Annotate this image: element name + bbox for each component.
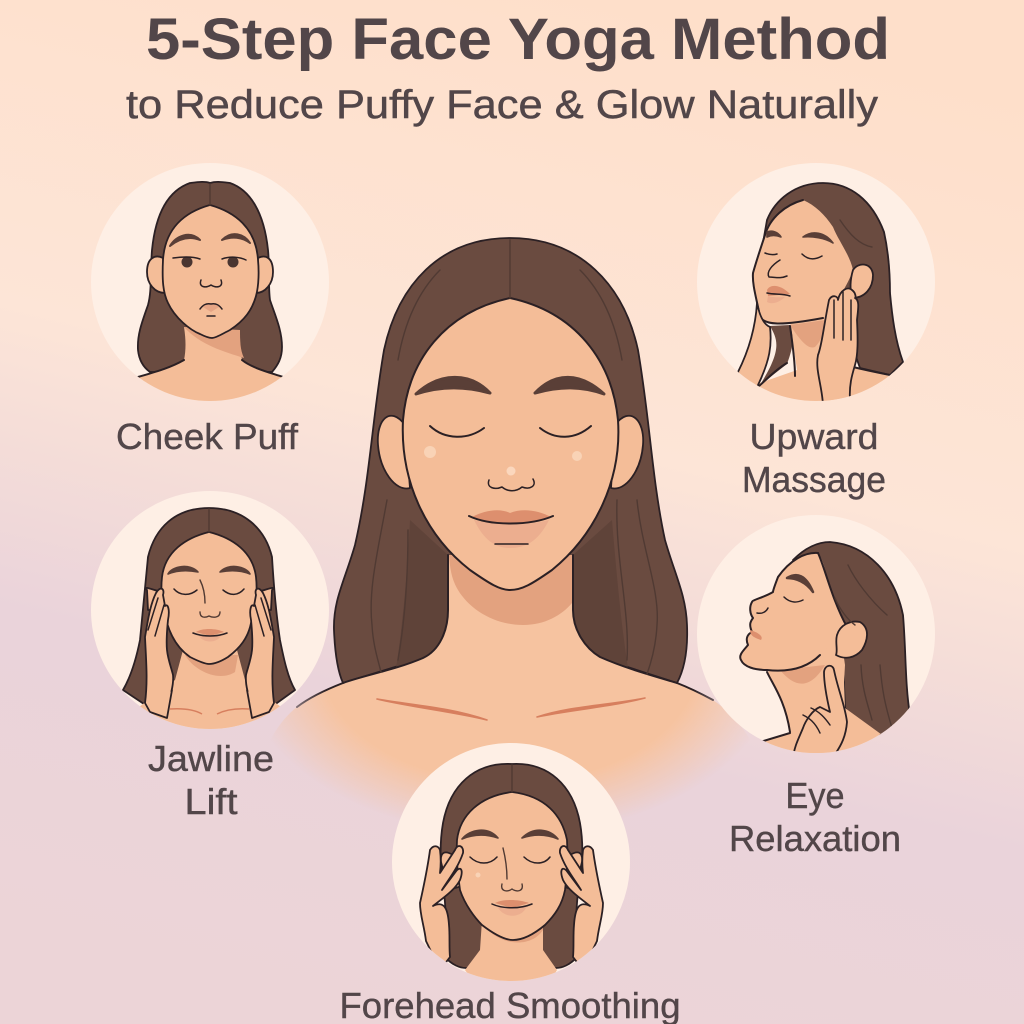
title: 5-Step Face Yoga Method (146, 7, 890, 72)
hair part and strands (371, 240, 657, 674)
body with fading shoulders (276, 554, 744, 812)
step: jawline lift (91, 491, 329, 822)
circle (91, 491, 329, 729)
circle (392, 743, 630, 981)
closed eyes (430, 426, 591, 437)
central portrait (276, 237, 744, 812)
hair shading (396, 520, 628, 668)
label: Jawline (148, 738, 274, 779)
step: eye relaxation: Relaxation (729, 818, 901, 859)
label: Eye (786, 775, 844, 816)
step: cheek puff (91, 163, 329, 457)
label: Upward (750, 416, 878, 457)
circle (91, 163, 329, 401)
hair back (334, 238, 687, 683)
blush spots (424, 446, 436, 458)
face (403, 298, 618, 590)
collarbones (377, 698, 645, 720)
ears (378, 416, 410, 488)
neck shadow (449, 555, 572, 625)
step: jawline lift: Lift (184, 781, 238, 822)
step: upward massage: Massage (742, 459, 886, 500)
eyebrows (416, 377, 490, 394)
circle (697, 515, 935, 753)
nose (488, 479, 534, 491)
label: Cheek Puff (116, 416, 299, 457)
step: upward massage (697, 163, 935, 500)
subtitle: to Reduce Puffy Face & Glow Naturally (126, 83, 878, 127)
lips (469, 510, 553, 548)
step: forehead smoothing (340, 743, 680, 1024)
circle (697, 163, 935, 401)
step: eye relaxation (697, 515, 935, 859)
